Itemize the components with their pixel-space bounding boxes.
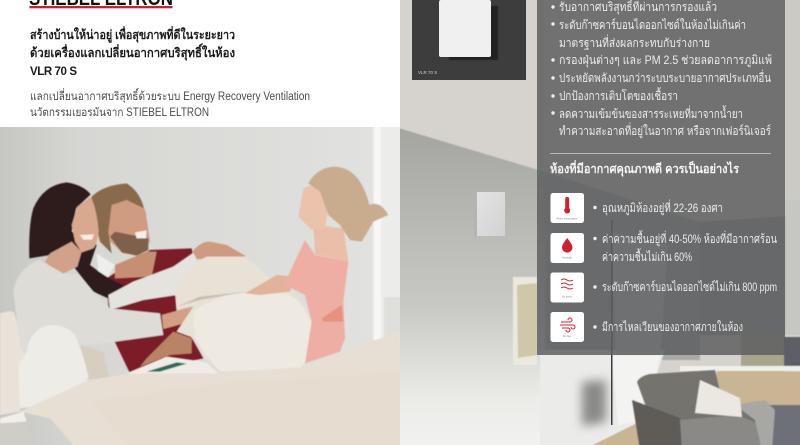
list: room conditions: อุณหภูมิห้องอยู่ที่ 22-26 องศา: [602, 199, 723, 216]
list: room conditions: มีการไหลเวียนของอากาศภายในห้อง: [602, 320, 743, 334]
curtain: [659, 355, 660, 356]
text block: subheading: [30, 87, 310, 119]
wall below ceiling line: [395, 127, 545, 445]
girl arm: [245, 275, 293, 295]
heading: main headline: VLR 70 S: [30, 66, 77, 78]
product image: VLR 70 S: VLR 70 S: [418, 70, 437, 75]
product image: VLR 70 S: [412, 0, 526, 80]
hand on pillow: [162, 304, 200, 329]
list: benefits bullets: ระดับก๊าซคาร์บอนไดออกไซด์ในห้องไม่เกินค่า: [559, 18, 746, 32]
icon: air purity waves: Air purity: [562, 296, 573, 298]
book: [127, 357, 218, 377]
girl dress: [285, 240, 348, 363]
duvet: [20, 332, 400, 445]
heading: good air quality room: ห้องที่มีอากาศคุณภาพดี ควรเป็นอย่างไร: [550, 160, 739, 177]
list: room conditions: [593, 199, 777, 334]
panel: intro white area: [0, 0, 400, 127]
wall unit: [474, 192, 505, 236]
woman hair: [29, 182, 123, 300]
list: benefits bullets: ลดความเข้มข้นของสารระเหยที่มาจากน้ำยา: [559, 105, 743, 121]
heading: main headline: ด้วยเครื่องแลกเปลี่ยนอากาศบริสุทธิ์ในห้อง: [30, 43, 235, 61]
picture frame: [513, 277, 537, 365]
woman face: [72, 197, 99, 252]
icon: humidity drop: [550, 233, 584, 263]
man neck and head: [115, 252, 157, 278]
list: benefits bullets: มาตรฐานที่ส่งผลกระทบกับร่างกาย: [559, 34, 710, 50]
icon: thermometer: Room temperature: [557, 218, 578, 220]
icon: air flow: [550, 312, 584, 342]
list: benefits bullets: ปกป้องการเติบโตของเชื้อรา: [559, 87, 678, 103]
photo: room with ventilation unit: [395, 0, 800, 445]
icon: air purity waves: [550, 272, 584, 302]
text block: subheading: แลกเปลี่ยนอากาศบริสุทธิ์ด้วยระบบ Energy Recovery Ventilation: [30, 87, 310, 103]
heading: main headline: [30, 26, 235, 78]
list: benefits bullets: รับอากาศบริสุทธิ์ที่ผ่านการกรองแล้ว: [559, 0, 717, 15]
man's arm over pillow: [108, 252, 197, 310]
panel: benefits: [537, 0, 785, 355]
woman legs: [18, 325, 89, 408]
sideboard: [741, 333, 784, 366]
man shirt: [107, 248, 203, 373]
photo: family on bed: [0, 120, 413, 445]
big pillow: [177, 257, 312, 372]
list: room conditions: ค่าความชื้นไม่เกิน 60%: [602, 248, 692, 264]
list: benefits bullets: กรองฝุ่นต่างๆ และ PM 2.5 ช่วยลดอาการภูมิแพ้: [559, 53, 772, 68]
icon: thermometer: [550, 193, 584, 223]
armchair: [632, 370, 775, 445]
heading: main headline: สร้างบ้านให้น่าอยู่ เพื่อสุขภาพที่ดีในระยะยาว: [30, 26, 235, 43]
girl hair: [308, 167, 388, 242]
text block: subheading: นวัตกรรมเยอรมันจาก STIEBEL ELTRON: [30, 107, 209, 119]
woman sweater: [13, 260, 163, 373]
list: benefits bullets: [551, 0, 772, 139]
icon: air flow: Air flow: [563, 335, 571, 338]
shadow on wall: [582, 380, 606, 426]
icon: humidity drop: Humidity: [562, 256, 573, 260]
floor: [583, 368, 800, 445]
pillow behind woman: [0, 311, 25, 415]
girl neck and face: [313, 225, 348, 262]
